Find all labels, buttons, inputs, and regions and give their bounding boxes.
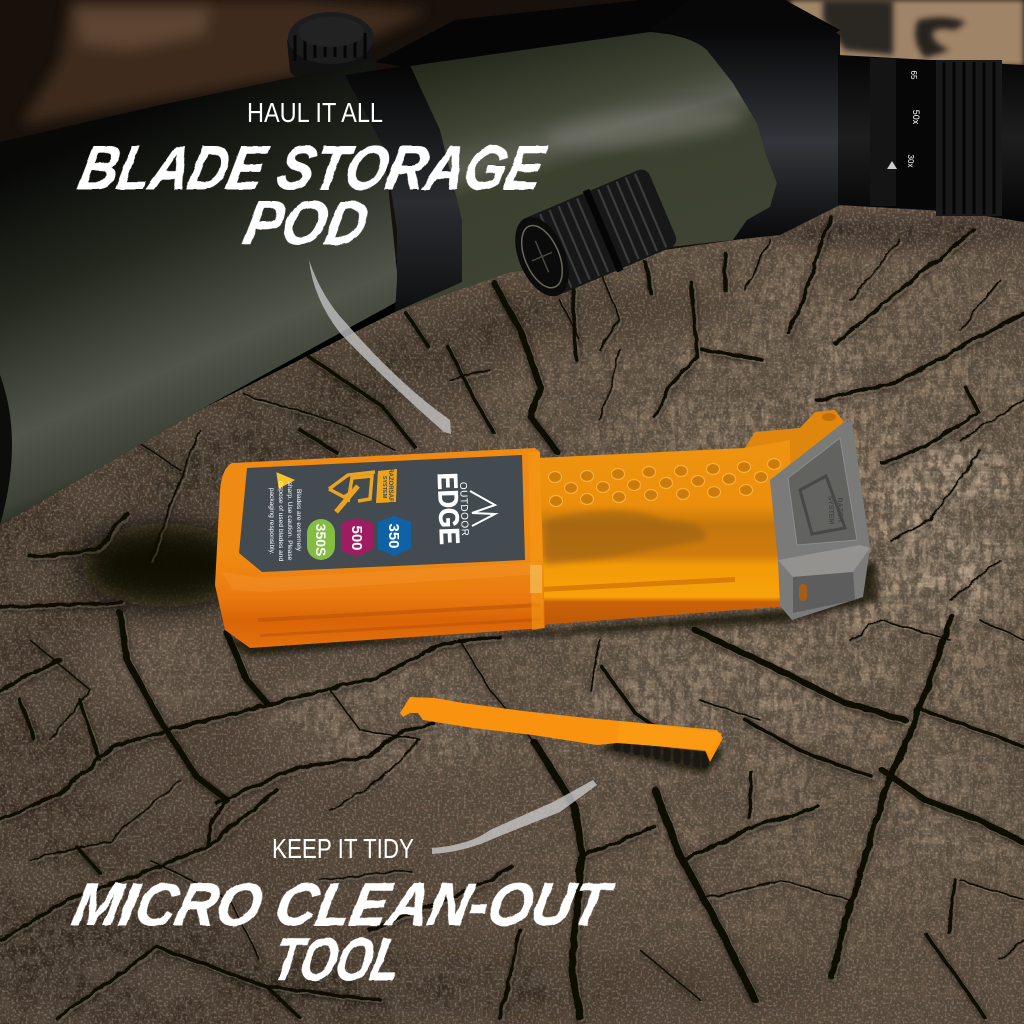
scope: main barrel — [0, 60, 400, 525]
label: warning text — [268, 481, 302, 561]
label: badge 350S — [307, 519, 335, 560]
scope: eyepiece rings: 30x — [906, 155, 915, 167]
pod: grey end cap: SYSTEM — [826, 495, 835, 525]
storage pod — [215, 410, 880, 656]
callout stroke: to tool — [432, 780, 597, 854]
scope: dark ring — [0, 375, 12, 525]
label: badge 350 — [378, 516, 411, 556]
label: warning text: packaging responsibly. — [268, 488, 275, 554]
label: outdoor edge logo — [432, 472, 495, 545]
scope: eyepiece rings: 50x — [911, 110, 921, 125]
pod: grey end cap: RAZOR — [836, 497, 843, 523]
callout stroke: to pod — [309, 260, 451, 434]
wood cracks — [0, 217, 1024, 1020]
scope: olive housing — [395, 32, 777, 312]
scope: eyepiece rings — [838, 55, 1024, 222]
title: micro clean-out: MICRO CLEAN-OUT — [67, 871, 619, 938]
pod: clear tube — [537, 410, 844, 625]
background: camouflage fabric — [0, 0, 1024, 260]
label: outdoor edge logo: OUTDOOR — [457, 482, 470, 536]
label: warning text: dispose of used blades and — [277, 481, 284, 561]
scope: eyepiece rings: 65 — [909, 71, 918, 80]
title: pod: POD — [238, 189, 375, 258]
label: badge 350S: 350S — [313, 524, 329, 556]
pod: vent holes — [548, 458, 780, 506]
label: badge 350: 350 — [385, 523, 402, 549]
label: razorsafe tag — [376, 468, 397, 506]
label: warning text: sharp. Use caution. Please — [286, 482, 293, 561]
title: tool: TOOL — [267, 926, 408, 993]
label: outdoor edge logo: EDGE — [432, 472, 465, 545]
scope: top knob — [287, 12, 374, 95]
label: warning triangle — [277, 473, 294, 488]
pod: grey end cap — [770, 421, 870, 620]
pod: orange sleeve — [215, 448, 545, 648]
label: badge 500 — [341, 518, 373, 557]
eyebrow: keep it tidy: KEEP IT TIDY — [272, 833, 414, 864]
scope: black top plate — [375, 0, 840, 70]
label: badge 500: 500 — [348, 525, 365, 551]
micro clean-out tool — [400, 697, 724, 775]
label: razorsafe tag: RAZORSAFE — [387, 468, 393, 506]
pod shadow — [225, 560, 880, 656]
scope: black eyepiece housing — [650, 0, 840, 240]
eyebrow: haul it all: HAUL IT ALL — [247, 97, 383, 128]
wood stump surface — [0, 205, 1024, 1024]
title: blade storage: BLADE STORAGE — [73, 134, 552, 203]
label: warning text: Blades are extremely — [295, 489, 302, 552]
spotting scope — [0, 0, 1024, 525]
heading group: blade storage pod — [73, 97, 552, 258]
label: razorsafe tag: SYSTEM — [381, 476, 387, 499]
scope: focus knob — [504, 165, 680, 306]
scope: housing highlight — [544, 101, 746, 155]
heading group: micro clean-out tool — [67, 833, 619, 993]
scope: black band — [345, 65, 462, 312]
label: razorsafe logo — [329, 472, 375, 512]
pod: grey label — [239, 455, 525, 572]
